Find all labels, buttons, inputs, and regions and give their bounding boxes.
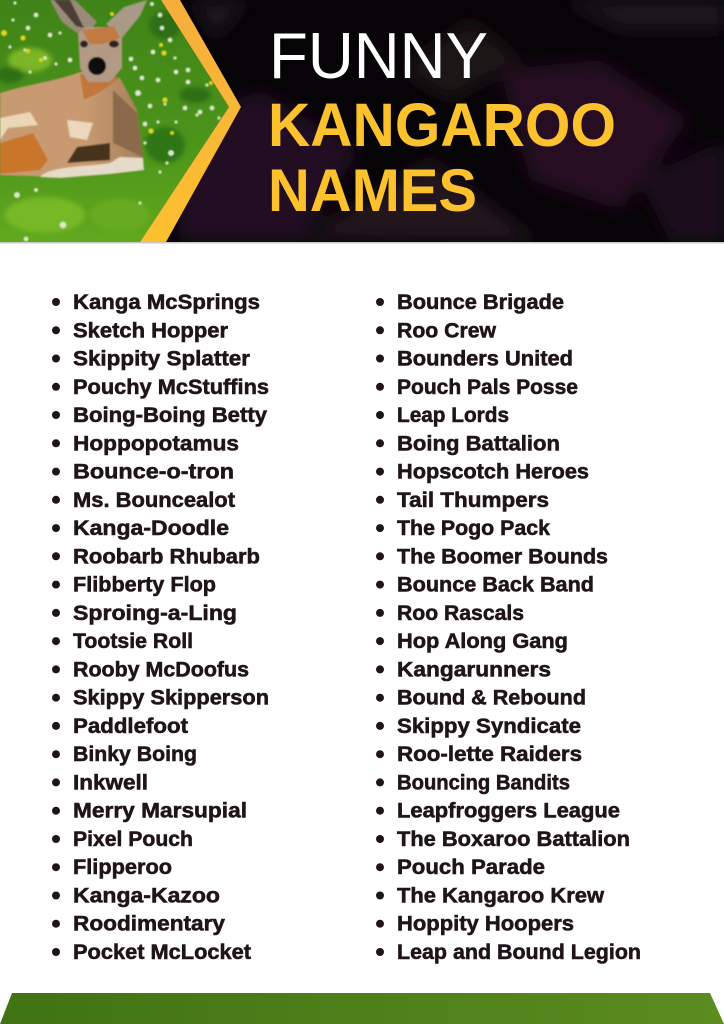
- list: left column: Pocket McLocket: [73, 941, 251, 964]
- list: right column: Tail Thumpers: [397, 489, 549, 512]
- list: left column: Kanga-Kazoo: [73, 884, 220, 908]
- list: left column: Flipperoo: [73, 856, 172, 879]
- photo: kangaroo lying on grass: [0, 0, 240, 242]
- list: left column: Kanga McSprings: [73, 291, 260, 314]
- forearm and paw: [40, 157, 144, 178]
- list: right column: Roo-lette Raiders: [397, 743, 582, 766]
- list: right column: Leap Lords: [397, 404, 509, 427]
- upper arm and chest highlights: [0, 112, 38, 140]
- list: left column: Roobarb Rhubarb: [73, 545, 260, 568]
- list: right column: The Boomer Bounds: [397, 545, 608, 568]
- list: right column: Bound & Rebound: [397, 687, 586, 710]
- yellow chevron band: [140, 0, 241, 242]
- list: right column: Leap and Bound Legion: [397, 941, 641, 964]
- orange belly: [0, 133, 48, 174]
- title: [268, 19, 616, 224]
- ears: [50, 0, 147, 38]
- thin header rule: [0, 242, 724, 244]
- list: left column: Skippity Splatter: [73, 348, 250, 370]
- dark faceted background: [140, 0, 724, 242]
- nose: [88, 57, 106, 75]
- list: right column: The Boxaroo Battalion: [397, 828, 630, 851]
- list: right column: Bounce Back Band: [397, 574, 594, 597]
- title line: names: NAMES: [268, 157, 477, 224]
- list: left column: Paddlefoot: [73, 715, 188, 738]
- list: left column: Skippy Skipperson: [73, 687, 269, 710]
- green footer band: [0, 993, 724, 1024]
- list: right column: Hoppity Hoopers: [397, 913, 574, 936]
- list: left column: Pouchy McStuffins: [73, 376, 269, 399]
- list: left column: Sketch Hopper: [73, 319, 228, 342]
- list: right column: Leapfroggers League: [397, 800, 620, 823]
- bullets: right column: [376, 298, 384, 956]
- list: right column: Skippy Syndicate: [397, 715, 581, 738]
- list: right column: Kangarunners: [397, 658, 551, 681]
- list: right column: Bouncing Bandits: [397, 771, 570, 794]
- yellow flowers: [0, 11, 214, 136]
- title line: kangaroo: KANGAROO: [268, 91, 616, 159]
- face: [78, 27, 122, 82]
- list: left column: [52, 291, 269, 964]
- list: left column: Tootsie Roll: [73, 630, 193, 653]
- body: [0, 72, 143, 177]
- list: left column: Merry Marsupial: [73, 800, 247, 823]
- list: left column: Pixel Pouch: [73, 828, 193, 851]
- list: left column: Boing-Boing Betty: [73, 404, 267, 427]
- list: left column: Ms. Bouncealot: [73, 489, 235, 512]
- list: right column: Bounce Brigade: [397, 291, 564, 314]
- neck: [80, 74, 120, 100]
- clover flowers: [8, 1, 221, 241]
- underside shadow: [67, 143, 110, 163]
- title line: funny: FUNNY: [269, 19, 488, 92]
- grass shading: [0, 11, 211, 233]
- list: right column: Hop Along Gang: [397, 630, 568, 653]
- list: left column: Bounce-o-tron: [73, 461, 234, 484]
- list: left column: Flibberty Flop: [73, 574, 216, 597]
- list: left column: Sproing-a-Ling: [73, 602, 237, 625]
- list: right column: Hopscotch Heroes: [397, 461, 589, 484]
- list: right column: The Pogo Pack: [397, 517, 550, 540]
- list: left column: Binky Boing: [73, 743, 197, 766]
- eyes: [80, 40, 88, 48]
- list: left column: Hoppopotamus: [73, 432, 239, 455]
- list: right column: Pouch Pals Posse: [397, 376, 578, 399]
- header banner: [0, 0, 724, 242]
- list: right column: Pouch Parade: [397, 856, 545, 879]
- list: left column: Kanga-Doodle: [73, 517, 229, 540]
- shoulder shading: [113, 90, 143, 157]
- list: right column: Roo Rascals: [397, 602, 524, 625]
- list: right column: Roo Crew: [397, 319, 497, 342]
- list: left column: Roodimentary: [73, 913, 225, 936]
- kangaroo: [0, 0, 147, 178]
- list: right column: The Kangaroo Krew: [397, 884, 605, 908]
- grass: [0, 0, 240, 242]
- list: right column: [376, 291, 641, 964]
- bullets: left column: [52, 298, 60, 956]
- list: left column: Rooby McDoofus: [73, 658, 249, 681]
- list: right column: Boing Battalion: [397, 432, 560, 455]
- list: right column: Bounders United: [397, 348, 573, 370]
- list: left column: Inkwell: [73, 771, 148, 794]
